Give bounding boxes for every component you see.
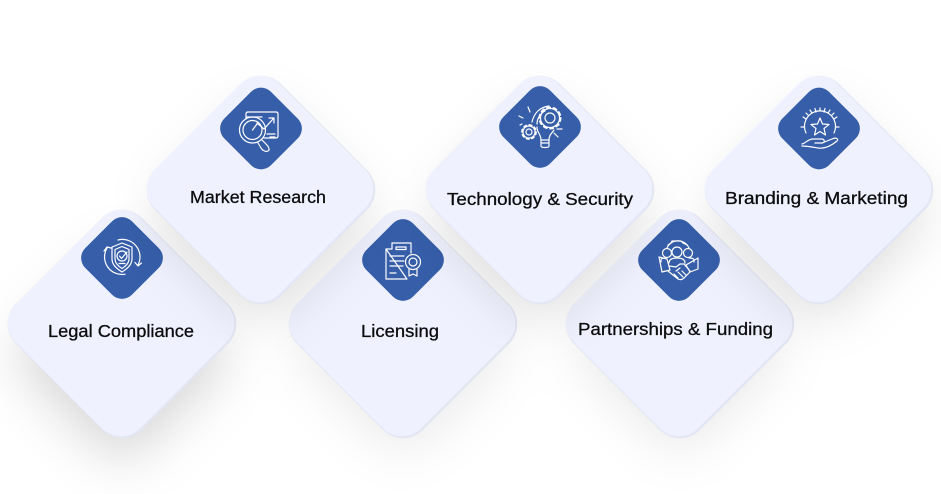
label: Branding & Marketing: Branding & Marketing xyxy=(725,188,908,208)
panel: Branding & Marketing xyxy=(693,64,941,316)
icon: handshake with team and gear xyxy=(632,213,726,307)
panel: Market Research xyxy=(135,64,387,316)
shadow layer: top row xyxy=(148,99,932,325)
panel: Partnerships & Funding xyxy=(554,198,806,450)
panel: Legal Compliance xyxy=(0,198,248,450)
label: Market Research: Market Research xyxy=(190,187,326,207)
icon: shield with check xyxy=(75,211,169,305)
panel: Licensing xyxy=(277,198,529,450)
panel: Technology & Security xyxy=(414,64,666,316)
label: Licensing: Licensing xyxy=(361,321,439,341)
icon: certificate document xyxy=(356,213,450,307)
label: Legal Compliance: Legal Compliance xyxy=(48,321,194,341)
icon: hand holding star xyxy=(772,82,866,175)
icon: magnifier over chart xyxy=(214,82,308,175)
label: Technology & Security: Technology & Security xyxy=(447,189,633,209)
shadow layer xyxy=(9,232,793,468)
icon: light bulb with gears xyxy=(493,80,587,174)
label: Partnerships & Funding: Partnerships & Funding xyxy=(578,319,773,339)
